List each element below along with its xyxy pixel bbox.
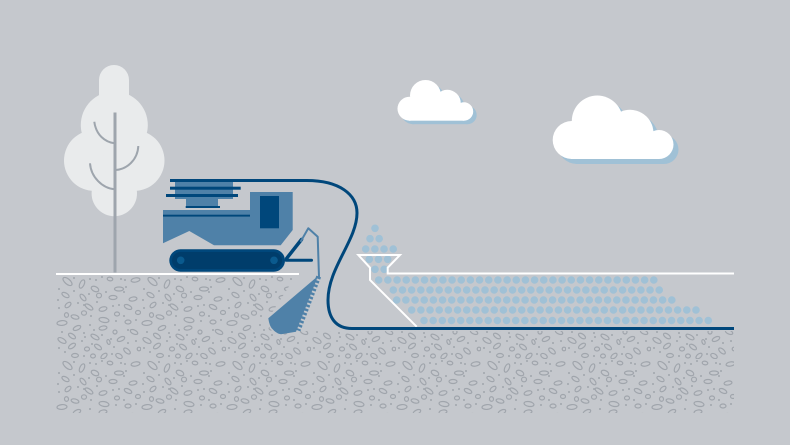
- cab window: [260, 196, 279, 228]
- trenching machine: [163, 182, 319, 334]
- large cloud body: [553, 96, 674, 159]
- small cloud: [398, 80, 477, 124]
- machine top stack: [166, 182, 241, 208]
- small cloud body: [398, 80, 473, 121]
- tree trunk and branches: [90, 112, 138, 272]
- small cloud shadow: [401, 84, 477, 124]
- large cloud: [553, 96, 678, 164]
- body stripe: [163, 215, 250, 217]
- tree crown: [64, 65, 164, 216]
- saw blade: [268, 276, 319, 334]
- large cloud shadow: [558, 100, 678, 164]
- tree: [64, 65, 164, 272]
- cleared trench area: [266, 270, 740, 331]
- soil texture: [56, 275, 734, 413]
- arm struts: [286, 228, 319, 277]
- crawler track: [169, 249, 285, 272]
- machine body: [163, 192, 293, 245]
- ground line left: [56, 273, 299, 275]
- hopper and right ground line: [358, 255, 734, 327]
- gravel dots: [366, 228, 717, 320]
- pipe: [170, 180, 734, 328]
